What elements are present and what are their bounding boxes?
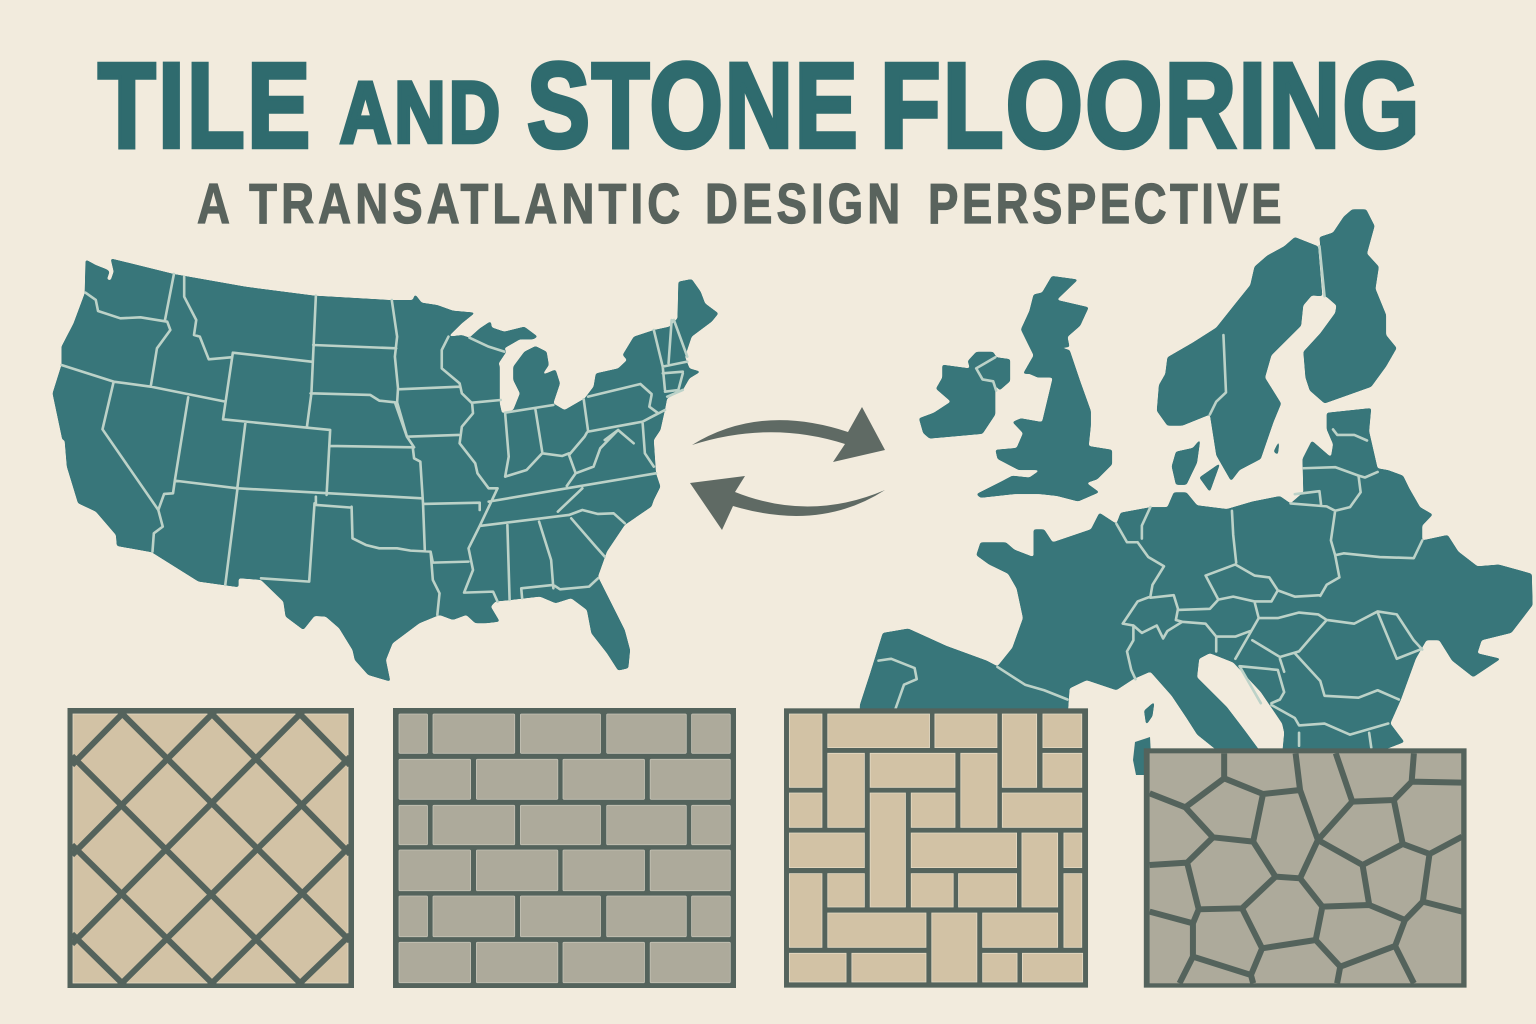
title: AND: [340, 64, 500, 161]
diamond grout lines: [72, 709, 350, 988]
subtitle: PERSPECTIVE: [928, 171, 1282, 235]
national borders: [878, 246, 1422, 748]
Norway and Sweden: [1157, 237, 1322, 481]
icon: Sardinia: [1133, 737, 1152, 775]
continental Europe: [860, 408, 1533, 755]
Denmark: [1172, 439, 1280, 492]
map: United States: [52, 258, 719, 682]
title: FLOORING: [880, 39, 1420, 173]
Great Britain: [976, 276, 1112, 502]
subtitle: DESIGN: [705, 171, 900, 235]
arrow: Europe to USA: [690, 476, 885, 530]
subtitle: A TRANSATLANTIC: [197, 171, 680, 235]
Corsica: [1144, 701, 1155, 725]
panel: herringbone tile: [784, 708, 1088, 988]
state borders: [61, 274, 687, 615]
title: STONE: [527, 38, 858, 173]
panel: flagstone: [1144, 748, 1467, 988]
panel: diamond tile: [68, 708, 354, 988]
Ireland: [919, 352, 1010, 439]
Finland: [1303, 209, 1397, 404]
title: TILE: [98, 38, 310, 173]
arrow: USA to Europe: [692, 407, 885, 462]
subtitle: [197, 171, 1282, 235]
title: [98, 38, 1420, 173]
panel: running bond stone: [393, 708, 736, 988]
irregular stone joints: [1150, 753, 1462, 983]
map: Europe: [860, 209, 1533, 755]
